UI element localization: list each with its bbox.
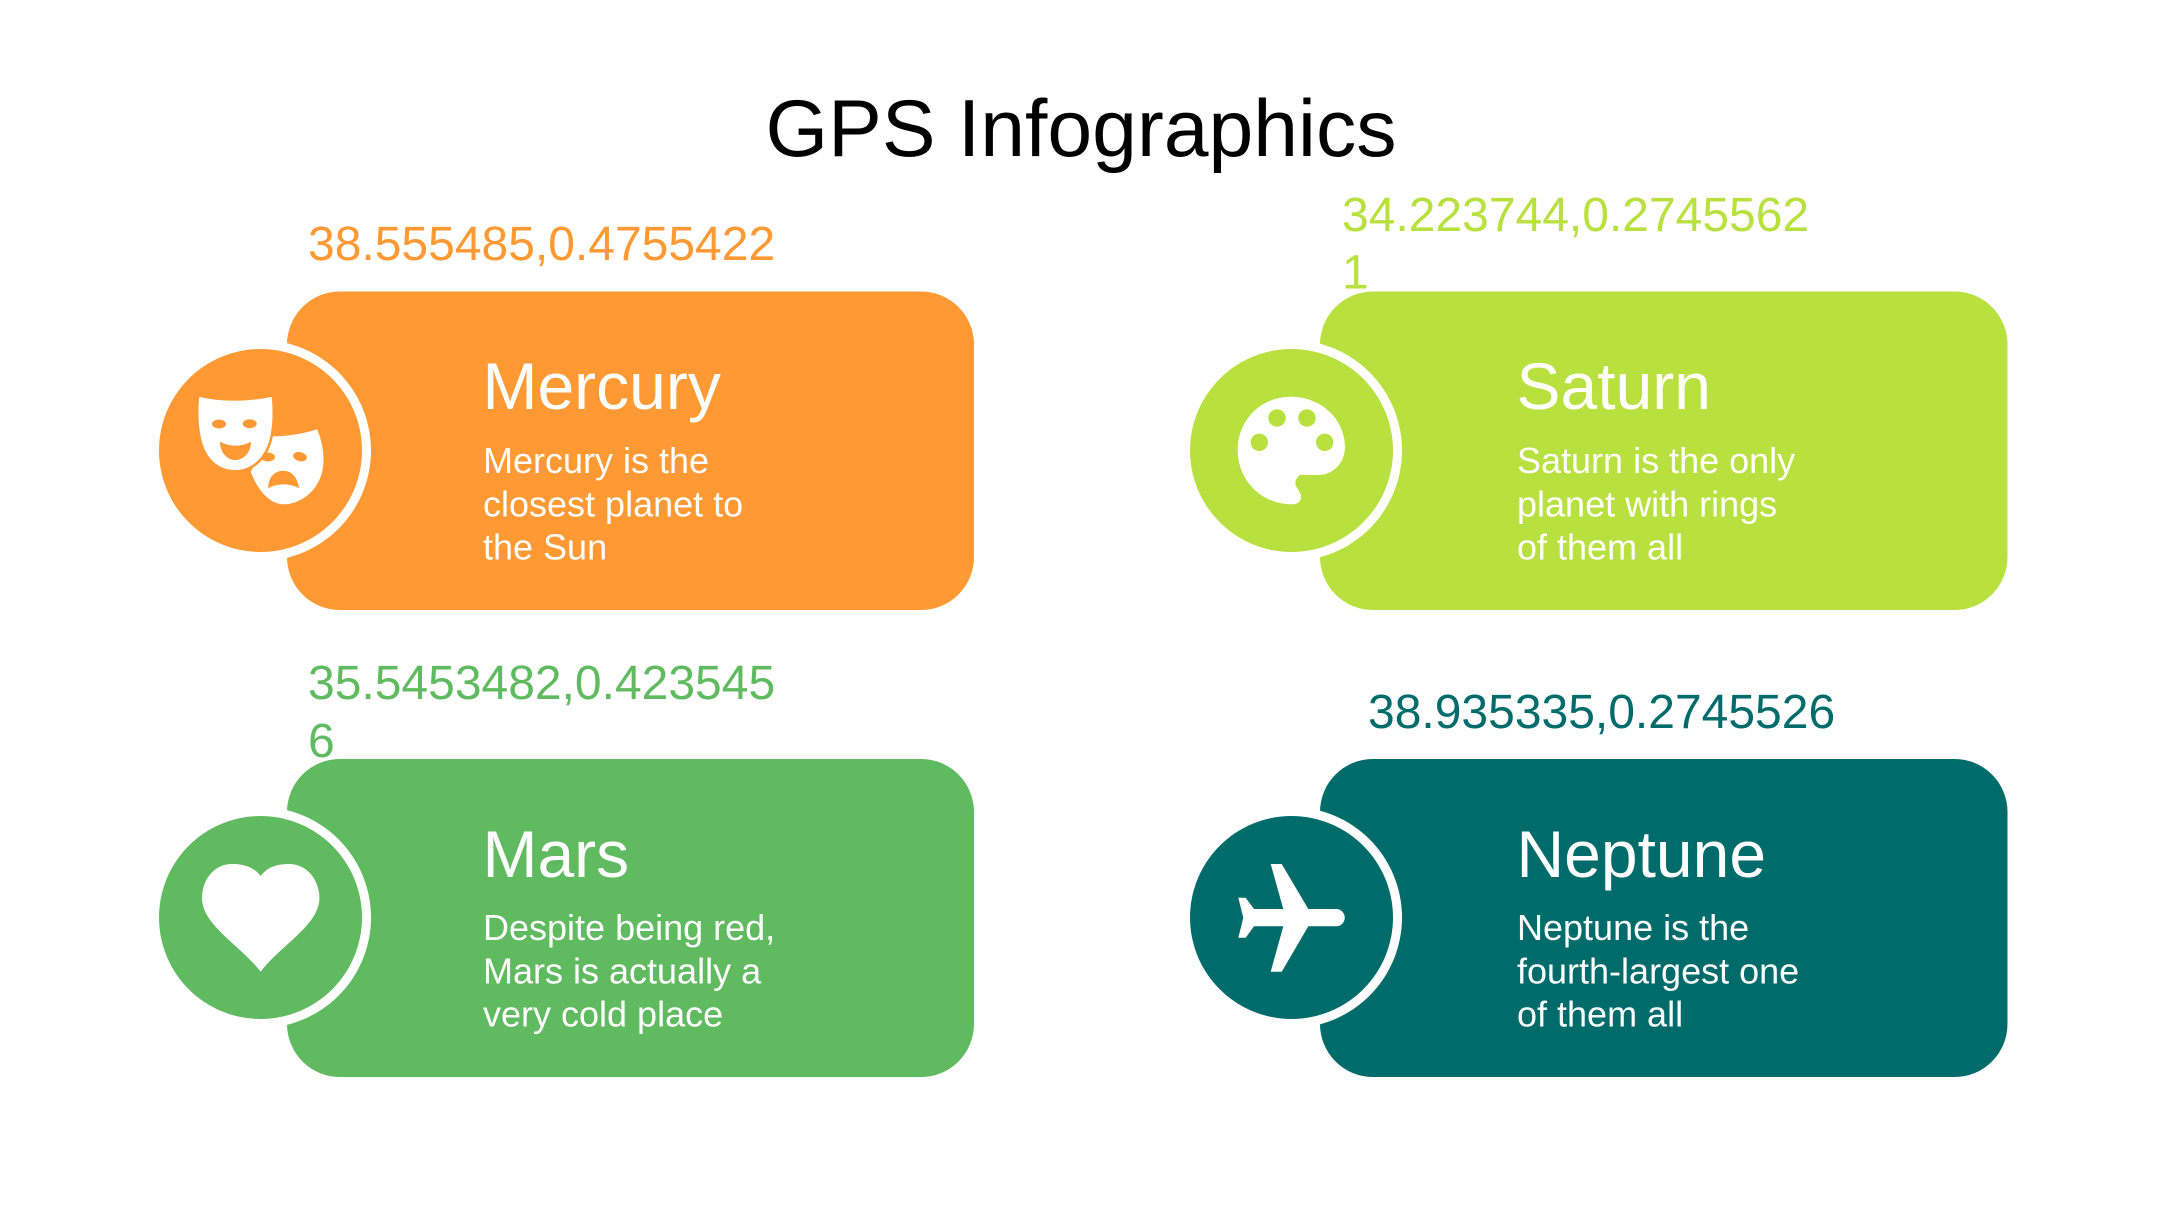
card: Mercury bbox=[287, 292, 974, 610]
panel: Saturn bbox=[1181, 189, 2008, 610]
card: Mars bbox=[287, 759, 974, 1077]
icon ring: Mercury bbox=[150, 340, 371, 561]
description: Saturn: planet with rings bbox=[1517, 483, 1777, 524]
heading: Saturn: Saturn bbox=[1516, 349, 1711, 423]
description: Mars: very cold place bbox=[483, 993, 723, 1034]
icon: palette bbox=[1238, 397, 1345, 504]
description: Saturn: Saturn is the only bbox=[1517, 440, 1795, 481]
heading: Mars: Mars bbox=[482, 817, 629, 891]
icon: heart bbox=[202, 864, 319, 972]
coordinates: Saturn: 1 bbox=[1342, 246, 1369, 300]
coordinates: Mars: 35.5453482,0.423545 bbox=[308, 657, 775, 710]
panel: Neptune bbox=[1181, 686, 2008, 1077]
icon ring: Saturn bbox=[1181, 340, 1402, 561]
icon circle: Mars bbox=[159, 816, 362, 1019]
heading: Mercury: Mercury bbox=[482, 349, 721, 423]
description: Saturn: of them all bbox=[1517, 526, 1683, 567]
description: Neptune: of them all bbox=[1517, 993, 1683, 1034]
icon: airplane bbox=[1238, 864, 1345, 972]
coordinates: Mercury: 38.555485,0.4755422 bbox=[308, 218, 775, 271]
icon circle: Mercury bbox=[159, 349, 362, 552]
panel: Mars bbox=[150, 657, 974, 1077]
description: Mercury: closest planet to bbox=[483, 483, 743, 524]
description: Mars: Mars is actually a bbox=[483, 950, 762, 991]
coordinates: Saturn: 34.223744,0.2745562 bbox=[1342, 189, 1809, 242]
description: Mercury: Mercury is the bbox=[483, 440, 709, 481]
icon ring: Mars bbox=[150, 807, 371, 1028]
icon circle: Saturn bbox=[1190, 349, 1393, 552]
title: GPS Infographics bbox=[766, 84, 1396, 174]
card: Neptune bbox=[1320, 759, 2008, 1077]
description: Mercury: the Sun bbox=[483, 526, 607, 567]
heading: Neptune: Neptune bbox=[1516, 817, 1766, 891]
description: Mars: Despite being red, bbox=[483, 907, 775, 948]
coordinates: Neptune: 38.935335,0.2745526 bbox=[1368, 686, 1835, 739]
description: Neptune: fourth-largest one bbox=[1517, 950, 1799, 991]
icon circle: Neptune bbox=[1190, 816, 1393, 1019]
panel: Mercury bbox=[150, 218, 974, 610]
icon: theatre masks bbox=[198, 397, 324, 504]
coordinates: Mars: 6 bbox=[308, 715, 335, 768]
description: Neptune: Neptune is the bbox=[1517, 907, 1749, 948]
icon ring: Neptune bbox=[1181, 807, 1402, 1028]
card: Saturn bbox=[1320, 292, 2008, 610]
